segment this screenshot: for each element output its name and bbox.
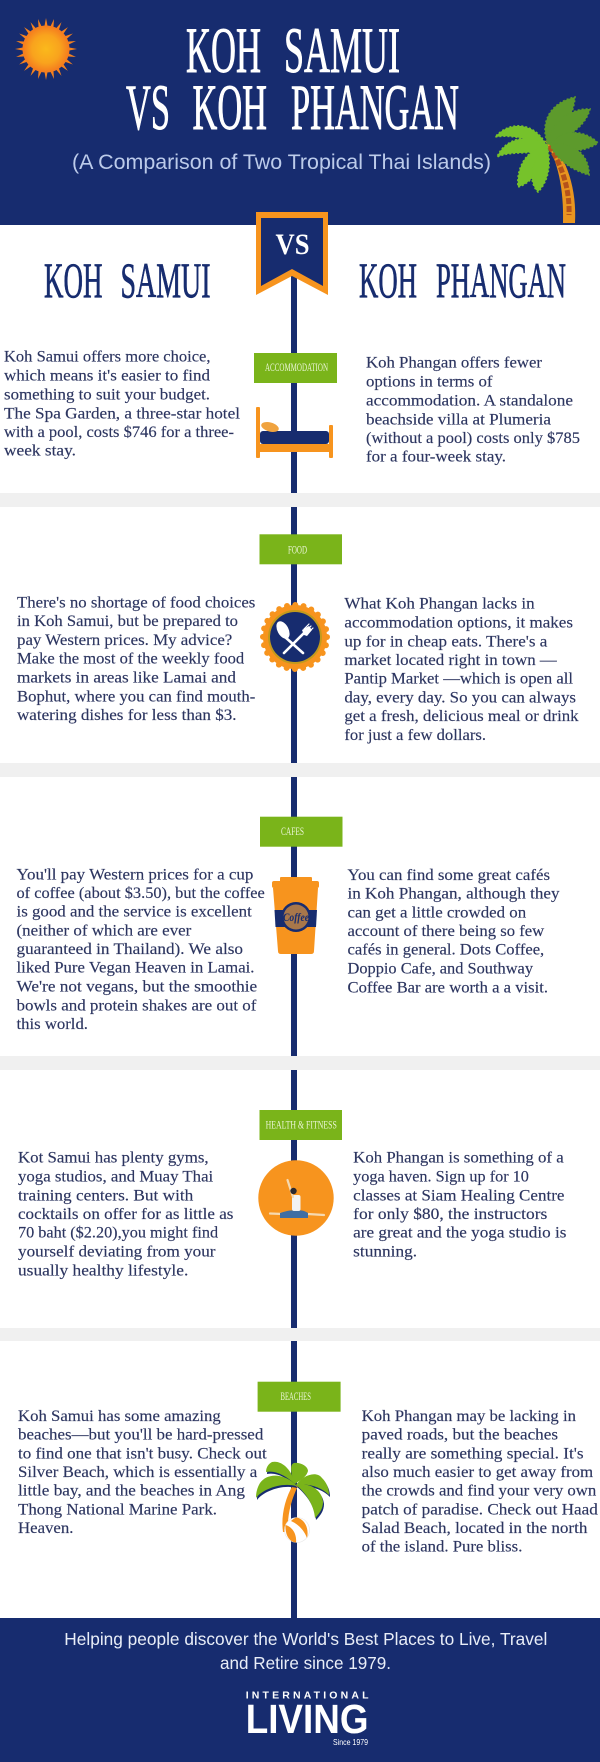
text: Koh Samui beaches: Koh Samui has some amazing <box>18 1408 221 1425</box>
panel: food <box>17 534 579 744</box>
footer tagline: Helping people discover the World's Best Places to Live, Travel <box>64 1629 547 1649</box>
header background <box>0 0 600 225</box>
column heading: Koh Phangan <box>359 252 566 308</box>
label: beaches <box>258 1382 341 1412</box>
text: Koh Samui cafes: is good and the service is excellent <box>16 904 253 921</box>
text: Koh Samui food: watering dishes for less than $3. <box>17 707 237 724</box>
title: KOH <box>186 15 261 87</box>
text: Koh Samui food: markets in areas like Lamai and <box>17 670 236 687</box>
text: Koh Samui beaches: to find one that isn't busy. Check out <box>18 1445 267 1462</box>
text: Koh Samui health: yourself deviating from your <box>18 1243 216 1260</box>
text: Koh Samui food: Bophut, where you can find mouth- <box>17 688 255 705</box>
label: cafes: CAFES <box>281 826 304 838</box>
text: Koh Samui beaches: Thong National Marine Park. <box>18 1501 217 1518</box>
central spine <box>291 272 297 1618</box>
title <box>126 15 459 144</box>
text: Koh Samui cafes: liked Pure Vegan Heaven in Lamai. <box>16 960 254 977</box>
text: Koh Phangan accommodation: for a four-week stay. <box>366 449 506 466</box>
text: Koh Samui health: training centers. But with <box>18 1187 194 1204</box>
text: Koh Samui food <box>17 594 255 724</box>
text: Koh Phangan food: get a fresh, delicious meal or drink <box>344 708 579 725</box>
text: Koh Phangan accommodation: accommodation. A standalone <box>366 393 573 410</box>
text: Koh Phangan beaches: of the island. Pure bliss. <box>362 1539 522 1556</box>
text: Koh Samui health <box>18 1150 233 1279</box>
label: beaches: BEACHES <box>280 1391 311 1403</box>
text: Koh Phangan accommodation: Koh Phangan offers fewer <box>366 355 543 372</box>
text: Koh Samui beaches: little bay, and the beaches in Ang <box>18 1483 245 1500</box>
label: health and fitness: HEALTH & FITNESS <box>266 1120 337 1132</box>
text: Koh Samui cafes <box>16 866 265 1033</box>
label: food <box>260 534 342 564</box>
logo: International Living: LIVING <box>246 1696 368 1742</box>
column heading: Koh Samui: SAMUI <box>120 252 210 308</box>
text: Koh Samui food: There's no shortage of food choices <box>17 594 255 611</box>
text: Koh Samui accommodation: something to suit your budget. <box>4 386 210 403</box>
text: Koh Samui cafes: We're not vegans, but the smoothie <box>16 979 257 996</box>
text: Koh Samui cafes: bowls and protein shakes are out of <box>16 997 257 1014</box>
title: SAMUI <box>284 15 400 87</box>
text: Koh Samui accommodation: which means it's easier to find <box>4 368 210 385</box>
text: Koh Phangan cafes: account of there being so few <box>348 923 545 940</box>
text: Koh Samui accommodation: Koh Samui offers more choice, <box>4 349 210 366</box>
text: Koh Phangan cafes: Coffee Bar are worth a a visit. <box>348 979 548 996</box>
divider bands <box>0 493 600 1341</box>
text: Koh Phangan health: Koh Phangan is something of a <box>353 1150 564 1167</box>
text: Koh Phangan food: day, every day. So you can always <box>344 689 576 706</box>
icon: coffee cup: Coffee <box>283 910 310 924</box>
panel: cafes <box>16 817 560 1033</box>
text: Koh Phangan beaches: really are something special. It's <box>362 1445 584 1462</box>
title: KOH <box>192 72 267 144</box>
text: Koh Samui health: 70 baht ($2.20),you might find <box>18 1225 218 1242</box>
text: Koh Phangan cafes: cafés in general. Dots Coffee, <box>348 942 544 959</box>
text: Koh Samui beaches: Silver Beach, which is essentially a <box>18 1464 257 1481</box>
text: Koh Phangan cafes: can get a little crowded on <box>348 904 526 921</box>
text: Koh Samui beaches: Heaven. <box>18 1520 74 1537</box>
footer tagline <box>64 1629 547 1673</box>
text: Koh Samui cafes: You'll pay Western prices for a cup <box>16 866 254 883</box>
column heading: Koh Samui <box>44 252 210 308</box>
text: Koh Samui health: cocktails on offer for as little as <box>18 1206 233 1223</box>
text: Koh Phangan health <box>353 1150 566 1260</box>
text: Koh Samui cafes: (neither of which are ever <box>16 922 192 939</box>
text: Koh Phangan cafes: Doppio Cafe, and Southway <box>348 961 533 978</box>
text: Koh Phangan cafes: in Koh Phangan, although they <box>348 886 560 903</box>
text: Koh Phangan food <box>344 596 579 744</box>
panel: beaches <box>18 1382 598 1556</box>
text: Koh Phangan beaches: Salad Beach, located in the north <box>362 1520 588 1537</box>
label: cafes <box>260 817 342 847</box>
text: Koh Phangan health: are great and the yoga studio is <box>353 1225 566 1242</box>
icon: fork and spoon badge <box>263 605 327 669</box>
label: accommodation: ACCOMMODATION <box>265 362 328 374</box>
label: food: FOOD <box>288 544 307 556</box>
VS banner: VS <box>276 228 310 261</box>
text: Koh Phangan beaches: Koh Phangan may be lacking in <box>362 1408 576 1425</box>
text: Koh Phangan accommodation: beachside villa at Plumeria <box>366 411 551 428</box>
text: Koh Samui accommodation: week stay. <box>4 443 76 460</box>
text: Koh Phangan health: classes at Siam Healing Centre <box>353 1187 565 1204</box>
icon: coffee cup <box>272 877 319 954</box>
icon: beach palm and ball <box>256 1462 330 1542</box>
text: Koh Phangan health: for only $80, the instructors <box>353 1206 547 1223</box>
text: Koh Phangan health: yoga haven. Sign up for 10 <box>353 1169 529 1186</box>
text: Koh Phangan food: What Koh Phangan lacks in <box>344 596 535 613</box>
label: accommodation <box>254 353 337 383</box>
icon: palm tree <box>495 97 598 223</box>
VS banner <box>256 212 328 295</box>
text: Koh Phangan cafes: You can find some great cafés <box>348 867 550 884</box>
logo: International Living: INTERNATIONAL <box>246 1690 369 1702</box>
text: Koh Phangan health: stunning. <box>353 1243 417 1260</box>
text: Koh Phangan beaches: paved roads, but the beaches <box>362 1427 558 1444</box>
text: Koh Samui accommodation: with a pool, costs $746 for a three- <box>4 424 234 441</box>
text: Koh Phangan accommodation: options in terms of <box>366 374 493 391</box>
text: Koh Samui beaches: beaches—but you'll be hard-pressed <box>18 1427 264 1444</box>
column heading: Koh Samui: KOH <box>44 252 102 308</box>
text: Koh Phangan food: accommodation options, it makes <box>344 614 573 631</box>
column heading: Koh Phangan: KOH <box>359 252 417 308</box>
label: health and fitness <box>260 1110 342 1140</box>
text: Koh Phangan food: Pantip Market —which is open all <box>344 671 574 688</box>
text: Koh Samui health: Kot Samui has plenty gyms, <box>18 1150 209 1167</box>
subtitle: (A Comparison of Two Tropical Thai Islands) <box>72 151 491 174</box>
text: Koh Samui cafes: guaranteed in Thailand). We also <box>16 941 243 958</box>
text: Koh Samui accommodation <box>4 349 241 460</box>
text: Koh Samui beaches <box>18 1408 267 1537</box>
text: Koh Samui health: usually healthy lifestyle. <box>18 1262 188 1279</box>
text: Koh Phangan accommodation <box>366 355 580 466</box>
text: Koh Samui accommodation: The Spa Garden, a three-star hotel <box>4 405 241 422</box>
icon: sun <box>15 18 77 80</box>
footer <box>0 1618 600 1762</box>
logo: International Living: Since 1979 <box>333 1737 368 1747</box>
text: Koh Samui food: pay Western prices. My advice? <box>17 632 232 649</box>
text: Koh Phangan food: for just a few dollars. <box>344 727 486 744</box>
text: Koh Samui cafes: this world. <box>16 1016 88 1033</box>
panel: accommodation <box>4 349 580 466</box>
panel: health and fitness <box>18 1110 566 1279</box>
text: Koh Phangan food: up for in cheap eats. There's a <box>344 633 547 650</box>
title: PHANGAN <box>291 72 459 144</box>
text: Koh Phangan beaches: patch of paradise. Check out Haad <box>362 1501 598 1518</box>
text: Koh Phangan beaches <box>362 1408 598 1556</box>
text: Koh Samui food: Make the most of the weekly food <box>17 651 244 668</box>
text: Koh Phangan food: market located right in town — <box>344 652 557 669</box>
text: Koh Phangan accommodation: (without a pool) costs only $785 <box>366 430 580 447</box>
text: Koh Phangan beaches: the crowds and find your very own <box>362 1483 597 1500</box>
icon: yoga figure <box>258 1160 334 1236</box>
text: Koh Samui cafes: of coffee (about $3.50), but the coffee <box>16 885 265 902</box>
footer tagline: and Retire since 1979. <box>220 1653 391 1673</box>
text: Koh Phangan beaches: also much easier to get away from <box>362 1464 593 1481</box>
text: Koh Phangan cafes <box>348 867 560 996</box>
title: VS <box>126 72 170 144</box>
text: Koh Samui health: yoga studios, and Muay Thai <box>18 1169 214 1186</box>
text: Koh Samui food: in Koh Samui, but be prepared to <box>17 613 238 630</box>
icon: bed <box>256 407 333 458</box>
